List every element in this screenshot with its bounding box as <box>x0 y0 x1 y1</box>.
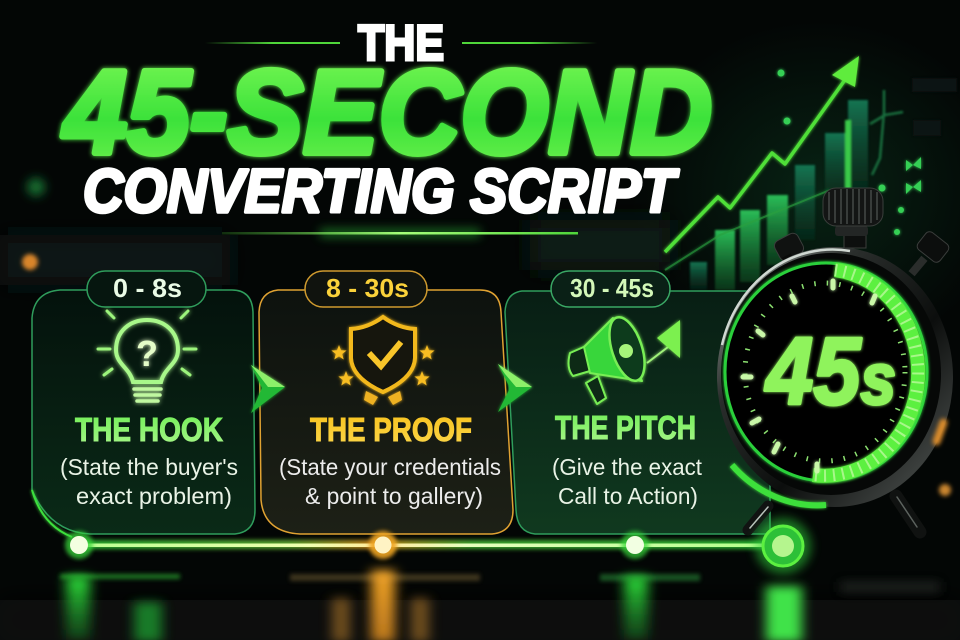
bezel shadow <box>721 253 941 495</box>
description: the pitch <box>552 454 703 509</box>
bezel green glow <box>725 263 927 481</box>
description: the hook: (State the buyer's <box>60 454 238 480</box>
title accent line right <box>462 42 597 44</box>
card outline <box>259 290 513 534</box>
floor reflections <box>0 570 960 640</box>
progress ring segments <box>813 270 918 476</box>
title accent line left <box>205 42 340 44</box>
ribbons <box>364 391 378 405</box>
description: the pitch: (Give the exact <box>552 454 703 480</box>
heading: the hook: THE HOOK <box>75 411 223 448</box>
title line: CONVERTING SCRIPT: CONVERTING SCRIPT <box>83 157 679 225</box>
time pill: 30 - 45s <box>551 271 670 307</box>
shield <box>351 317 415 392</box>
side button left <box>772 231 806 269</box>
megaphone center <box>619 344 633 358</box>
timeline node 30s <box>621 531 649 559</box>
megaphone handle <box>586 376 606 404</box>
check mark <box>369 342 401 366</box>
arrow shaft <box>647 347 668 363</box>
timeline node 45s <box>755 518 811 574</box>
background growth chart <box>665 56 957 290</box>
description: the proof: & point to gallery) <box>305 483 483 509</box>
heading: the pitch: THE PITCH <box>555 409 696 446</box>
card outline <box>505 291 770 534</box>
description: the hook <box>60 454 238 509</box>
time pill: 30 - 45s: 30 - 45s <box>570 273 654 303</box>
timeline node 8s <box>369 531 397 559</box>
timeline node 0s <box>65 531 93 559</box>
megaphone bell <box>603 313 651 385</box>
title <box>62 15 712 237</box>
megaphone cone <box>584 318 642 381</box>
chrome highlight <box>722 250 850 345</box>
time pill: 0 - 8s <box>87 271 206 307</box>
title word: THE: THE <box>358 15 444 71</box>
title line: 45-SECOND: 45-SECOND <box>62 46 712 179</box>
feet <box>748 496 920 532</box>
side button right <box>909 230 951 276</box>
chart trend arrow <box>665 56 859 270</box>
arrow: proof to pitch <box>498 364 532 412</box>
arrow head <box>657 320 680 358</box>
megaphone grip <box>569 346 590 376</box>
description: the pitch: Call to Action) <box>558 483 698 509</box>
lower rim glow <box>732 465 826 505</box>
chart sparkles <box>778 70 921 235</box>
amber rim highlight <box>931 417 949 447</box>
stopwatch <box>717 188 953 532</box>
card lower edge glow <box>32 490 72 537</box>
time pill: 8 - 30s: 8 - 30s <box>326 273 409 303</box>
crown <box>823 188 883 248</box>
countdown label: 45s <box>764 318 896 425</box>
panel: the pitch <box>505 271 770 534</box>
progress ring <box>813 270 918 476</box>
minute ticks <box>745 283 905 461</box>
icon: light bulb with question mark <box>98 311 196 401</box>
stopwatch body <box>717 247 953 507</box>
panel: the hook <box>32 271 255 537</box>
timeline <box>65 518 811 574</box>
description: the proof <box>279 454 501 509</box>
stars <box>331 345 435 386</box>
title underline <box>222 229 578 237</box>
timeline glow <box>79 540 779 549</box>
heading: the proof: THE PROOF <box>310 411 472 448</box>
time pill: 8 - 30s <box>305 271 427 307</box>
description: the proof: (State your credentials <box>279 454 501 480</box>
time pill: 0 - 8s: 0 - 8s <box>113 273 182 303</box>
panel: the proof <box>259 271 513 534</box>
icon: light bulb with question mark: ? <box>136 333 158 374</box>
arrow: hook to proof <box>251 365 285 413</box>
card outline <box>32 290 255 534</box>
major ticks <box>743 281 875 471</box>
icon: megaphone with arrow <box>569 313 680 404</box>
timeline line <box>79 544 779 547</box>
chart bars <box>690 78 957 290</box>
icon: shield with check and stars <box>331 317 435 405</box>
description: the hook: exact problem) <box>76 483 232 509</box>
